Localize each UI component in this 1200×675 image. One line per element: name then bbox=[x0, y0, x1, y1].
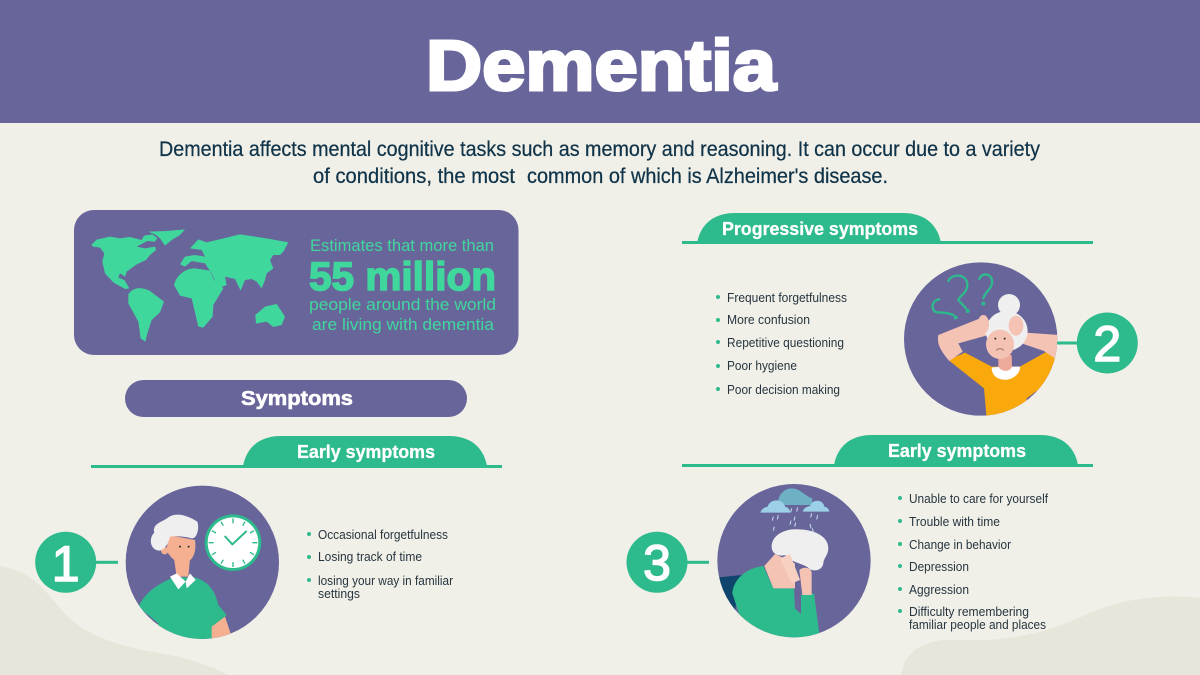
list: progressive symptoms: Repetitive questioning bbox=[727, 336, 844, 350]
statistic text: are living with dementia bbox=[312, 315, 495, 334]
list: early symptoms right: familiar people and places bbox=[909, 618, 1046, 632]
list: early symptoms right: Change in behavior bbox=[909, 538, 1011, 552]
intro text: of conditions, the most bbox=[313, 165, 515, 188]
symptoms pill: Symptoms bbox=[241, 388, 353, 410]
world map bbox=[91, 229, 288, 342]
illustration: man with clock, number 1: 1 bbox=[52, 536, 80, 592]
list: early symptoms left: Losing track of time bbox=[318, 550, 422, 564]
intro text: common of which is Alzheimer's disease. bbox=[527, 165, 888, 188]
section header: progressive symptoms bbox=[682, 213, 1093, 244]
illustration: crying person under rain cloud, number 3: 3 bbox=[643, 535, 671, 591]
list: progressive symptoms: Poor decision making bbox=[727, 383, 840, 397]
statistic text bbox=[309, 236, 496, 334]
list: early symptoms left: losing your way in familiar bbox=[318, 574, 453, 588]
list: early symptoms left: settings bbox=[318, 587, 360, 601]
list: progressive symptoms bbox=[716, 291, 847, 397]
section header: early symptoms left bbox=[91, 436, 502, 468]
section header: early symptoms right: Early symptoms bbox=[888, 441, 1026, 461]
list: progressive symptoms: More confusion bbox=[727, 313, 810, 327]
panel: global statistic bbox=[74, 210, 518, 355]
decorative wave: bottom left bbox=[0, 566, 228, 675]
clock icon bbox=[205, 514, 261, 571]
statistic text: people around the world bbox=[309, 295, 496, 314]
section header: early symptoms right bbox=[682, 435, 1093, 467]
list: early symptoms right: Trouble with time bbox=[909, 515, 1000, 529]
list: early symptoms right: Depression bbox=[909, 560, 969, 574]
section header: early symptoms left: Early symptoms bbox=[297, 442, 435, 462]
list: progressive symptoms: Poor hygiene bbox=[727, 359, 797, 373]
list: early symptoms left: Occasional forgetfulness bbox=[318, 528, 448, 542]
statistic text: Estimates that more than bbox=[310, 236, 494, 255]
symptoms pill bbox=[125, 380, 467, 417]
list: early symptoms right: Difficulty remembering bbox=[909, 605, 1029, 619]
list: early symptoms right bbox=[898, 492, 1048, 632]
decorative wave: bottom right bbox=[901, 596, 1200, 675]
section header: progressive symptoms: Progressive symptoms bbox=[722, 219, 918, 239]
list: early symptoms left bbox=[307, 528, 453, 601]
title: Dementia bbox=[426, 27, 777, 106]
list: early symptoms right: Aggression bbox=[909, 583, 969, 597]
list: progressive symptoms: Frequent forgetfulness bbox=[727, 291, 847, 305]
illustration: man with clock, number 1 bbox=[35, 486, 279, 643]
intro text: Dementia affects mental cognitive tasks such as memory and reasoning. It can occur due to a variety bbox=[159, 138, 1040, 161]
statistic text: 55 million bbox=[309, 255, 496, 299]
illustration: woman holding head with question marks, number 2: 2 bbox=[1093, 316, 1121, 372]
list: early symptoms right: Unable to care for yourself bbox=[909, 492, 1048, 506]
illustration: crying person under rain cloud, number 3 bbox=[626, 484, 871, 640]
intro text bbox=[159, 138, 1040, 188]
rain cloud bbox=[760, 488, 829, 532]
illustration: woman holding head with question marks, number 2 bbox=[904, 262, 1138, 418]
header banner bbox=[0, 0, 1200, 123]
